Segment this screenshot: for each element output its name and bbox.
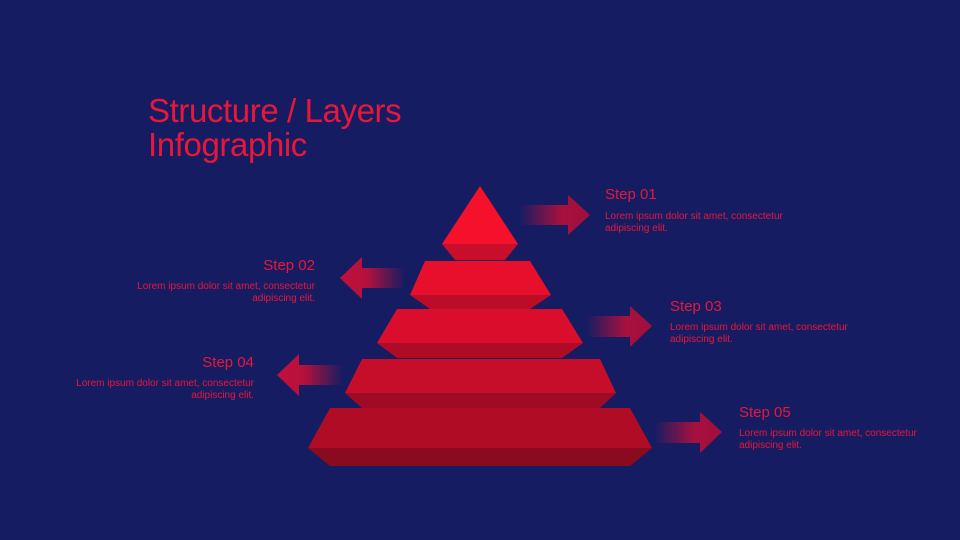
step 05 text: Step 05	[739, 404, 791, 421]
title	[148, 92, 401, 163]
step 02 text	[137, 257, 315, 304]
step 02 text: Step 02	[263, 257, 315, 274]
title: Structure / Layers	[148, 92, 401, 129]
step 01 text: Lorem ipsum dolor sit amet, consectetur	[605, 211, 783, 222]
step 04 text: Step 04	[202, 354, 254, 371]
step 01 text	[605, 186, 783, 234]
arrow 4	[277, 354, 343, 396]
arrow 2	[340, 257, 405, 299]
step 04 text	[76, 354, 254, 401]
pyramid layer 2	[410, 261, 551, 309]
step 02 text: Lorem ipsum dolor sit amet, consectetur	[137, 281, 315, 292]
step 05 text: adipiscing elit.	[739, 440, 802, 451]
pyramid layer 1	[442, 186, 518, 260]
step 03 text: adipiscing elit.	[670, 334, 733, 345]
arrow 5	[655, 412, 722, 453]
step 04 text: adipiscing elit.	[191, 390, 254, 401]
pyramid layer 3	[377, 309, 583, 358]
step 05 text	[739, 404, 917, 451]
arrow 1	[520, 195, 590, 235]
step 02 text: adipiscing elit.	[252, 293, 315, 304]
title: Infographic	[148, 126, 307, 163]
step 05 text: Lorem ipsum dolor sit amet, consectetur	[739, 428, 917, 439]
step 03 text: Step 03	[670, 298, 722, 315]
step 03 text	[670, 298, 848, 345]
pyramid layer 4	[345, 359, 616, 408]
step 01 text: Step 01	[605, 186, 657, 203]
arrow 3	[587, 306, 652, 347]
pyramid layer 5	[308, 408, 652, 466]
step 01 text: adipiscing elit.	[605, 223, 668, 234]
step 03 text: Lorem ipsum dolor sit amet, consectetur	[670, 322, 848, 333]
step 04 text: Lorem ipsum dolor sit amet, consectetur	[76, 378, 254, 389]
